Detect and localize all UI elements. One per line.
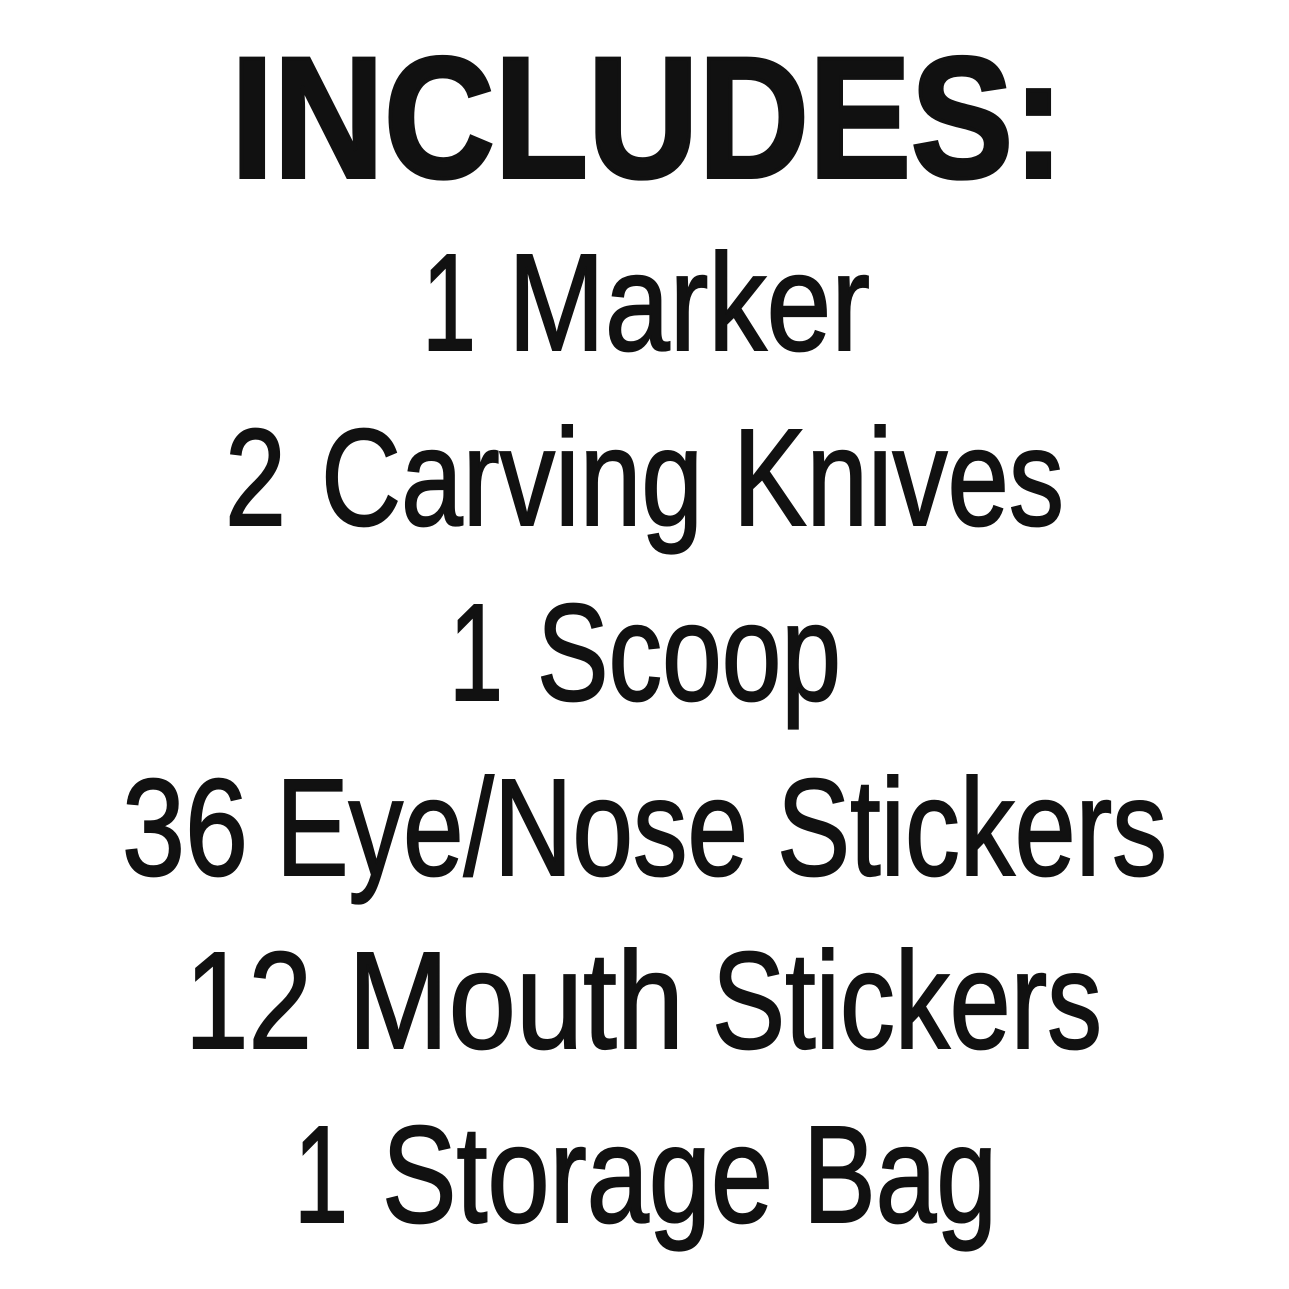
item: eye and nose stickers: Eye/Nose	[276, 751, 748, 905]
item: storage bag: 1	[294, 1098, 348, 1252]
item: eye and nose stickers	[122, 751, 1167, 905]
item: carving knives: 2	[225, 401, 286, 555]
item: mouth stickers: Mouth	[348, 924, 684, 1078]
item: carving knives	[225, 401, 1064, 555]
item: scoop: Scoop	[537, 576, 841, 730]
item: eye and nose stickers: Stickers	[777, 751, 1167, 905]
item: mouth stickers: Stickers	[712, 924, 1102, 1078]
item: storage bag: Bag	[803, 1098, 997, 1252]
item: eye and nose stickers: 36	[122, 751, 248, 905]
item: storage bag	[294, 1098, 997, 1252]
item: marker: 1	[422, 226, 476, 380]
item: storage bag: Storage	[382, 1098, 773, 1252]
item: carving knives: Carving	[321, 401, 703, 555]
item: mouth stickers: 12	[185, 924, 312, 1078]
item: scoop	[449, 576, 841, 730]
title: INCLUDES:	[231, 22, 1064, 214]
item: mouth stickers	[185, 924, 1102, 1078]
item: scoop: 1	[449, 576, 503, 730]
item: carving knives: Knives	[733, 401, 1064, 555]
item: marker: Marker	[508, 226, 870, 380]
